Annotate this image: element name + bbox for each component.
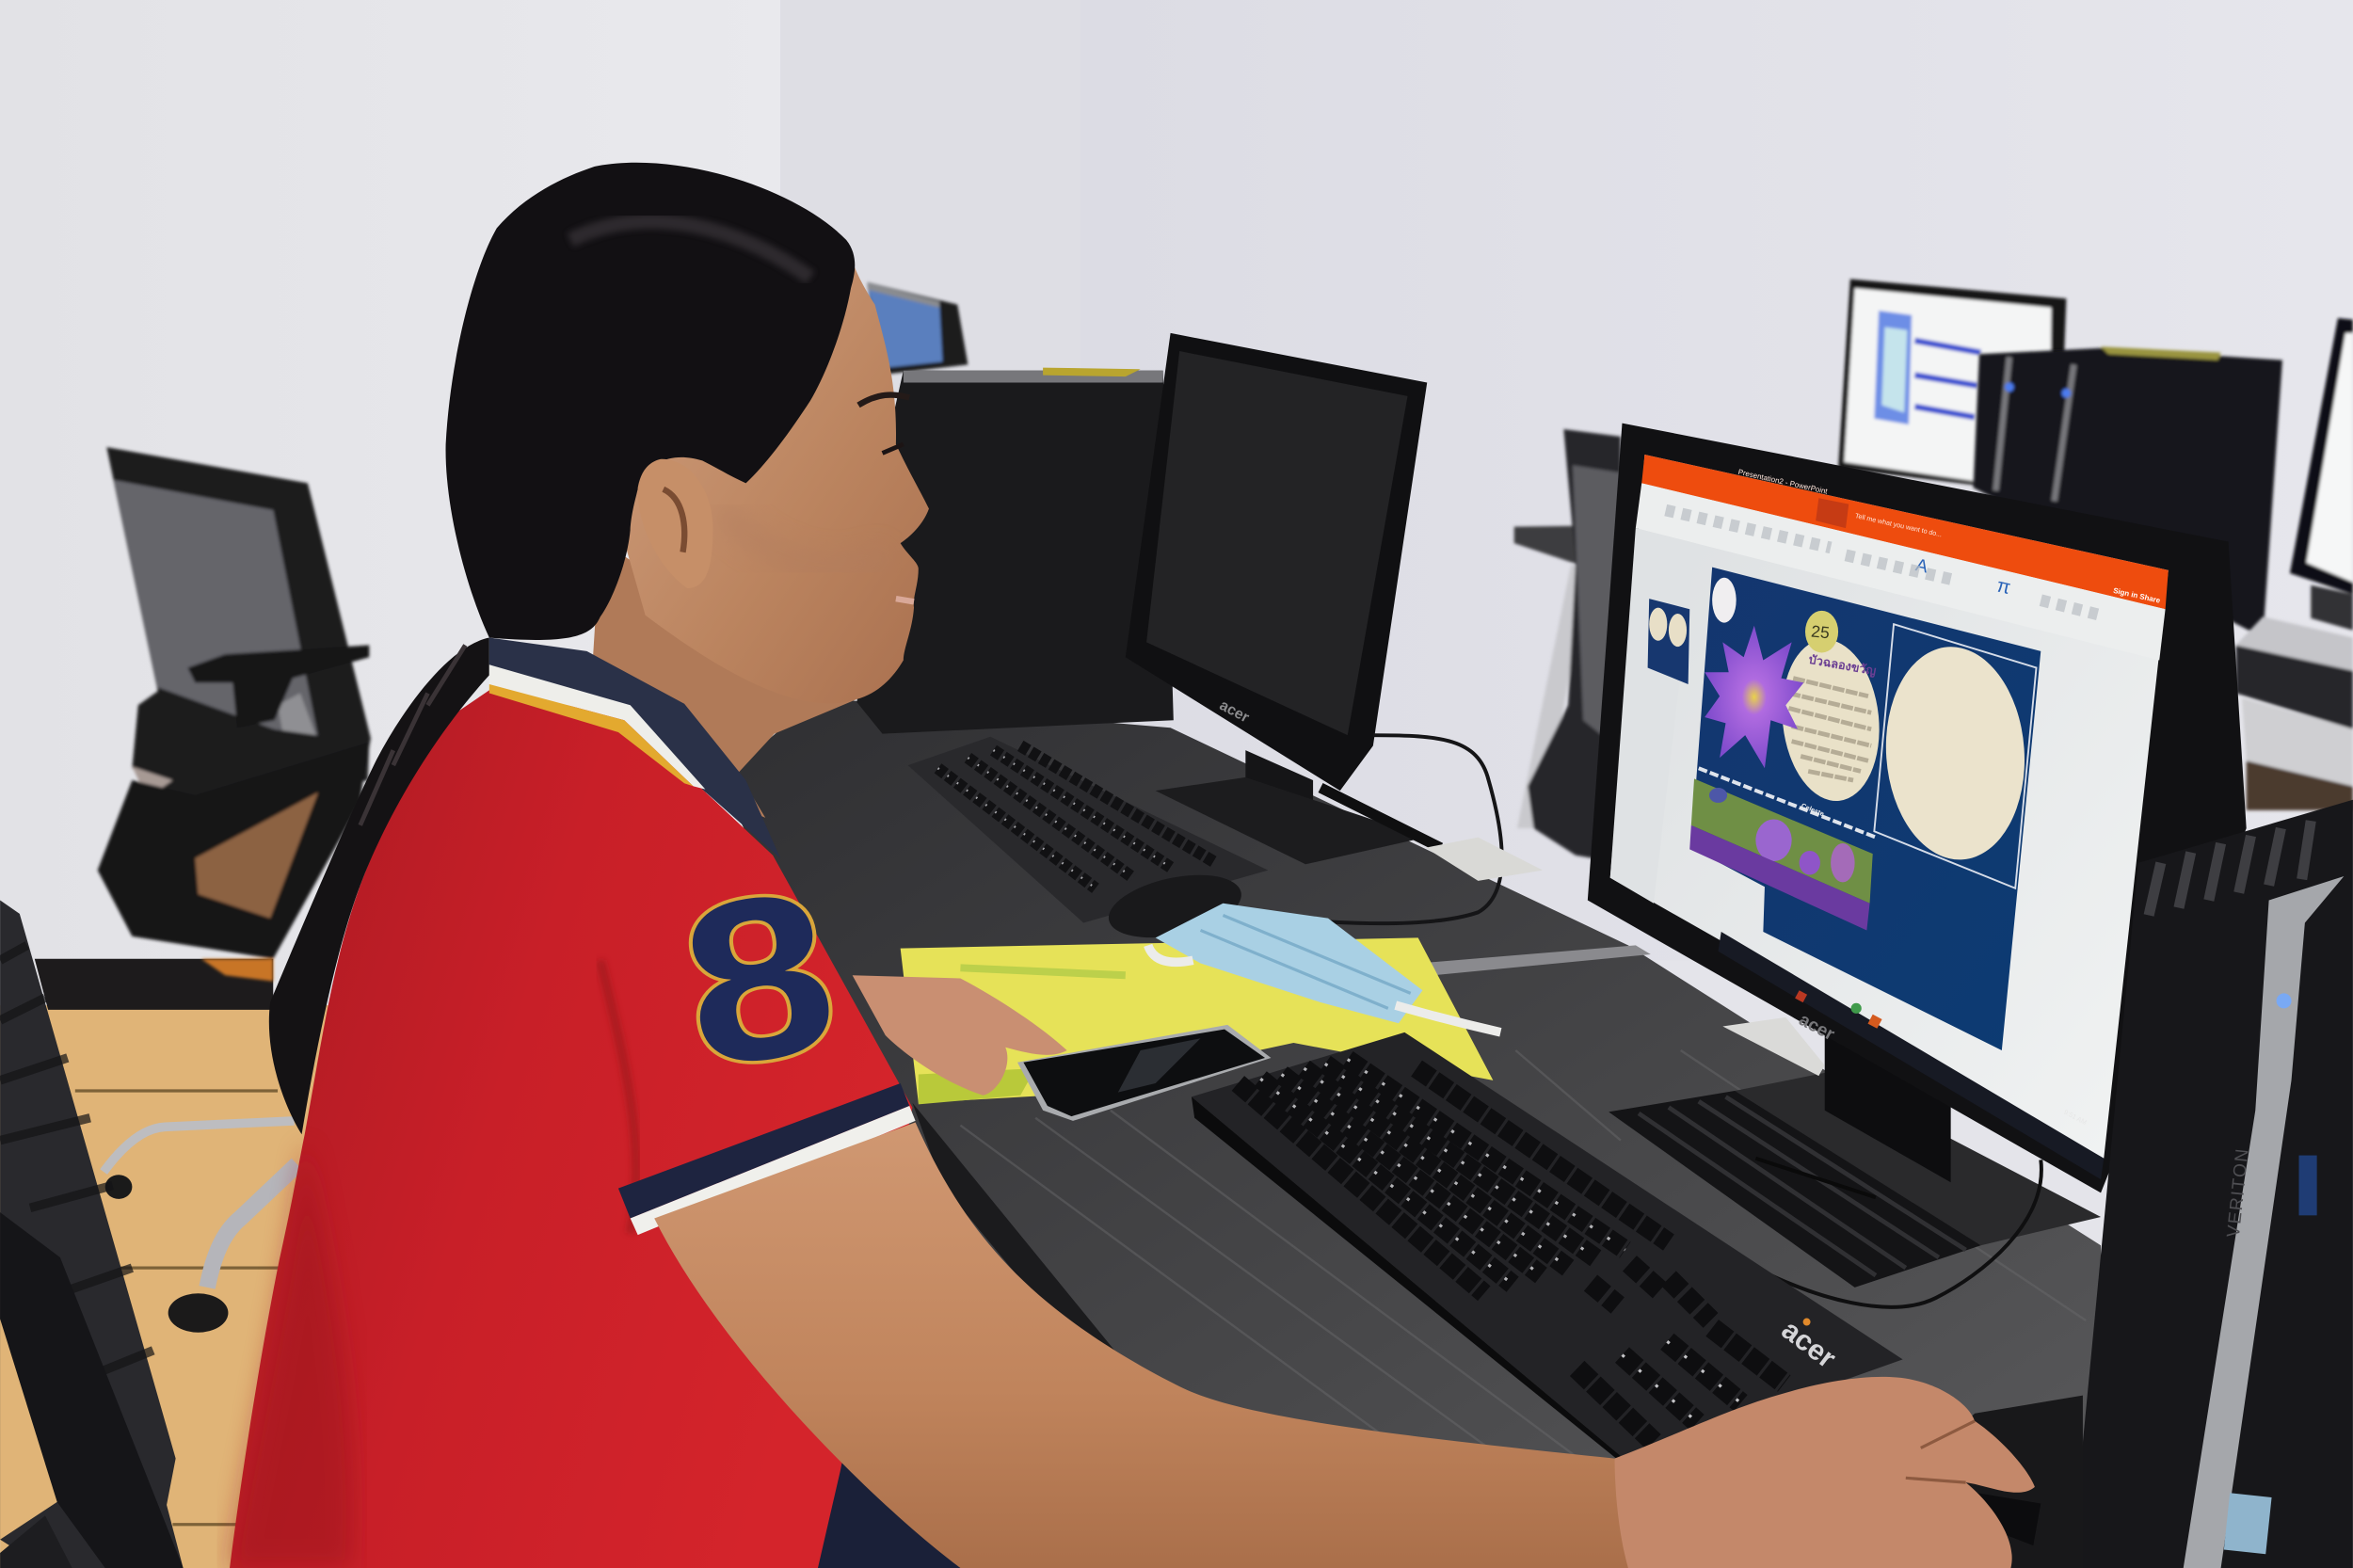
logo bbox=[1712, 578, 1737, 623]
back white monitor bbox=[1838, 280, 2066, 495]
wood floor bbox=[0, 959, 360, 1568]
sleeve trim bbox=[618, 1083, 916, 1235]
smartphone bbox=[1017, 1025, 1271, 1121]
nav and numeric clusters bbox=[1591, 1263, 1711, 1320]
slide canvas: 25 bbox=[1810, 621, 1831, 642]
front right computer tower: VERITON bbox=[2224, 1146, 2253, 1239]
slide body lines bbox=[1788, 679, 1871, 780]
ear bbox=[638, 459, 712, 588]
middle keyboard bbox=[908, 737, 1268, 922]
circle right bbox=[1879, 642, 2031, 864]
braid bbox=[269, 638, 489, 1134]
middle monitor (off): acer bbox=[1217, 697, 1252, 726]
neck bbox=[593, 540, 856, 818]
hand on mouse bbox=[1615, 1377, 2035, 1568]
screen: Tell me what you want to do... bbox=[1854, 512, 1943, 538]
hair bbox=[446, 163, 855, 640]
monitor cable bbox=[1759, 1160, 2041, 1307]
main key rows bbox=[1238, 1060, 1669, 1293]
face bbox=[616, 240, 929, 704]
woman bbox=[230, 163, 2035, 1568]
surgical face mask bbox=[1148, 904, 1500, 1032]
black tower on back desk bbox=[856, 368, 1174, 734]
main keyboard: acer bbox=[1776, 1315, 1841, 1375]
screen: Presentation2 - PowerPoint bbox=[1737, 468, 1829, 496]
screen bbox=[1610, 455, 2169, 1179]
left hand bbox=[853, 975, 1067, 1096]
front right computer tower bbox=[2071, 800, 2353, 1568]
thumbnail pane bbox=[1610, 528, 1696, 904]
desk surfaces bbox=[720, 697, 2101, 1568]
chair wheel base bbox=[104, 1121, 297, 1333]
screen: π bbox=[1994, 575, 2012, 599]
selection box bbox=[1874, 624, 2037, 888]
slide canvas bbox=[1689, 568, 2041, 1050]
mouse pad and mouse under hand bbox=[1897, 1396, 2083, 1568]
black cable bbox=[1245, 735, 1502, 923]
main keyboard bbox=[1192, 1032, 1903, 1464]
purple lotus bbox=[1705, 626, 1803, 768]
back-left office chair bbox=[98, 447, 371, 982]
back small monitor behind hair bbox=[868, 282, 968, 376]
middle mouse bbox=[1103, 864, 1247, 948]
shirt collar bbox=[489, 638, 780, 858]
lips bbox=[896, 599, 914, 601]
eyebrow bbox=[858, 395, 909, 405]
screen: Sign in Share bbox=[2112, 586, 2162, 605]
slide canvas: Celeste bbox=[1800, 802, 1825, 818]
screen: A bbox=[1913, 555, 1930, 578]
taskbar bbox=[1719, 932, 2104, 1179]
photo strip bbox=[1691, 778, 1873, 904]
yellow folder bbox=[901, 937, 1493, 1104]
back desk left bbox=[1514, 429, 1636, 863]
far right desk and keyboard bbox=[2236, 616, 2353, 810]
eye bbox=[883, 444, 904, 453]
powerpoint ribbon bbox=[1641, 455, 2169, 609]
red polo shirt bbox=[230, 690, 912, 1568]
main monitor stand bbox=[1609, 1017, 2101, 1307]
thumbnail bbox=[1648, 599, 1689, 684]
taskbar: 9:51 AM bbox=[2062, 1109, 2088, 1127]
main monitor bbox=[1588, 424, 2247, 1192]
sleeve number 8: 8 bbox=[667, 842, 851, 1117]
pants bbox=[810, 1418, 990, 1568]
circle left bbox=[1774, 634, 1887, 806]
back desk with monitors bbox=[1514, 280, 2353, 863]
purple band bbox=[1689, 825, 1870, 930]
arm bbox=[654, 1123, 1666, 1568]
caption bbox=[1699, 768, 1876, 838]
middle monitor (off) bbox=[1126, 333, 1543, 923]
front-left office chair bbox=[0, 901, 184, 1568]
acer logo: acer bbox=[1796, 1010, 1838, 1045]
slide title: บัวฉลองขวัญ bbox=[1807, 652, 1878, 679]
25 badge bbox=[1805, 611, 1838, 653]
back tower bbox=[1974, 346, 2282, 638]
far right monitor bbox=[2290, 318, 2353, 631]
